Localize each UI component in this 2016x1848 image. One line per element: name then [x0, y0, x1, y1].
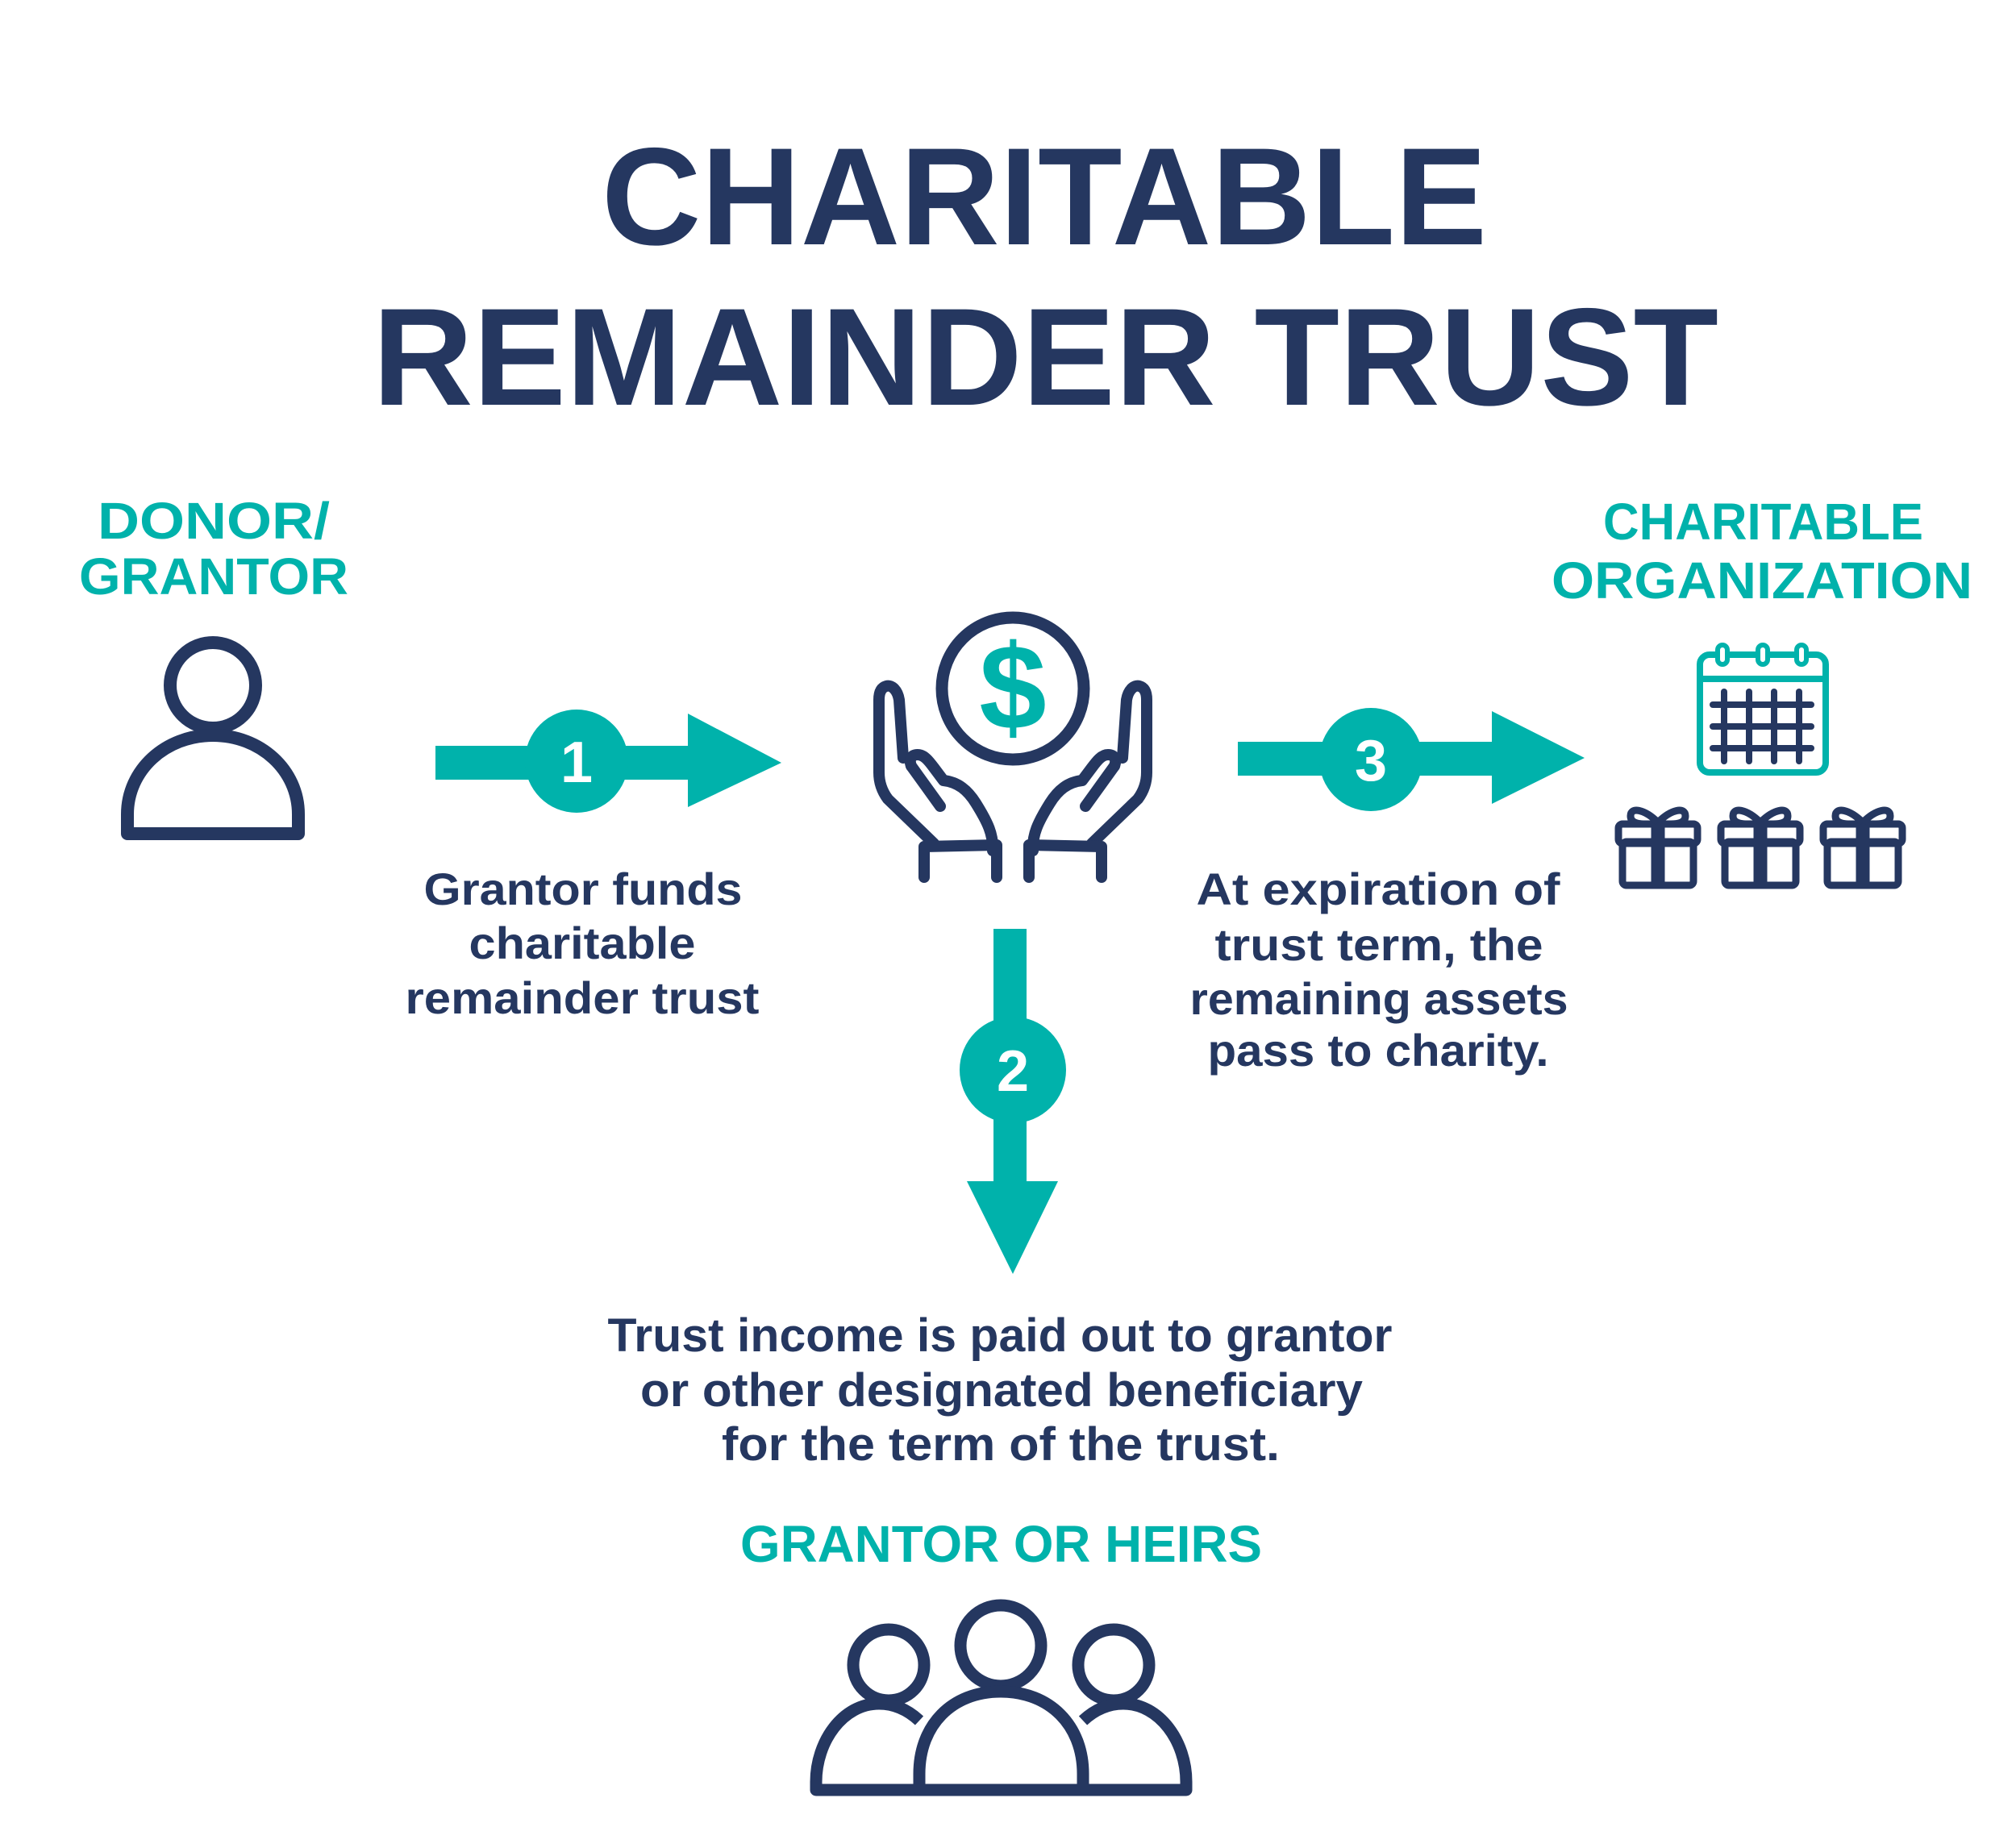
text: step 1: remainder trust	[405, 972, 760, 1023]
text: step 2	[608, 1309, 1392, 1471]
icon: group of people	[816, 1605, 1186, 1790]
text: step 3: remaining assets	[1190, 973, 1568, 1024]
heading: donor/grantor: DONOR/	[98, 492, 330, 550]
title: REMAINDER TRUST	[373, 280, 1718, 435]
icon: person	[127, 643, 298, 834]
text: step 3: pass to charity.	[1208, 1025, 1548, 1076]
icon: gifts	[1618, 810, 1902, 885]
heading: grantor or heirs: GRANTOR OR HEIRS	[740, 1515, 1262, 1573]
title: CHARITABLE	[602, 119, 1487, 274]
icon: calendar	[1700, 645, 1826, 772]
title	[373, 119, 1718, 435]
heading: charitable organization: CHARITABLE	[1603, 493, 1923, 551]
arrow 2: 2	[997, 1039, 1029, 1104]
text: step 2: or other designated beneficiary	[640, 1364, 1363, 1417]
text: step 3: At expiration of	[1197, 864, 1560, 914]
arrow 3	[1238, 708, 1585, 811]
text: step 2: for the term of the trust.	[722, 1418, 1280, 1471]
text: step 3: trust term, the	[1214, 919, 1543, 970]
text: step 1: Grantor funds	[424, 864, 742, 914]
heading: donor/grantor: GRANTOR	[79, 547, 348, 606]
text: step 1	[405, 864, 760, 1023]
arrow 3: 3	[1355, 729, 1387, 793]
heading: charitable organization	[1552, 493, 1972, 610]
arrow 1	[435, 710, 781, 813]
heading: donor/grantor	[79, 492, 348, 606]
heading: charitable organization: ORGANIZATION	[1552, 551, 1972, 610]
text: step 2: Trust income is paid out to grantor	[608, 1309, 1392, 1362]
icon: hands holding coin	[879, 618, 1147, 877]
arrow 1: 1	[560, 730, 593, 795]
icon: hands holding coin: $	[979, 619, 1047, 755]
text: step 3	[1190, 864, 1568, 1076]
text: step 1: charitable	[469, 918, 695, 968]
arrow 2	[960, 929, 1066, 1274]
